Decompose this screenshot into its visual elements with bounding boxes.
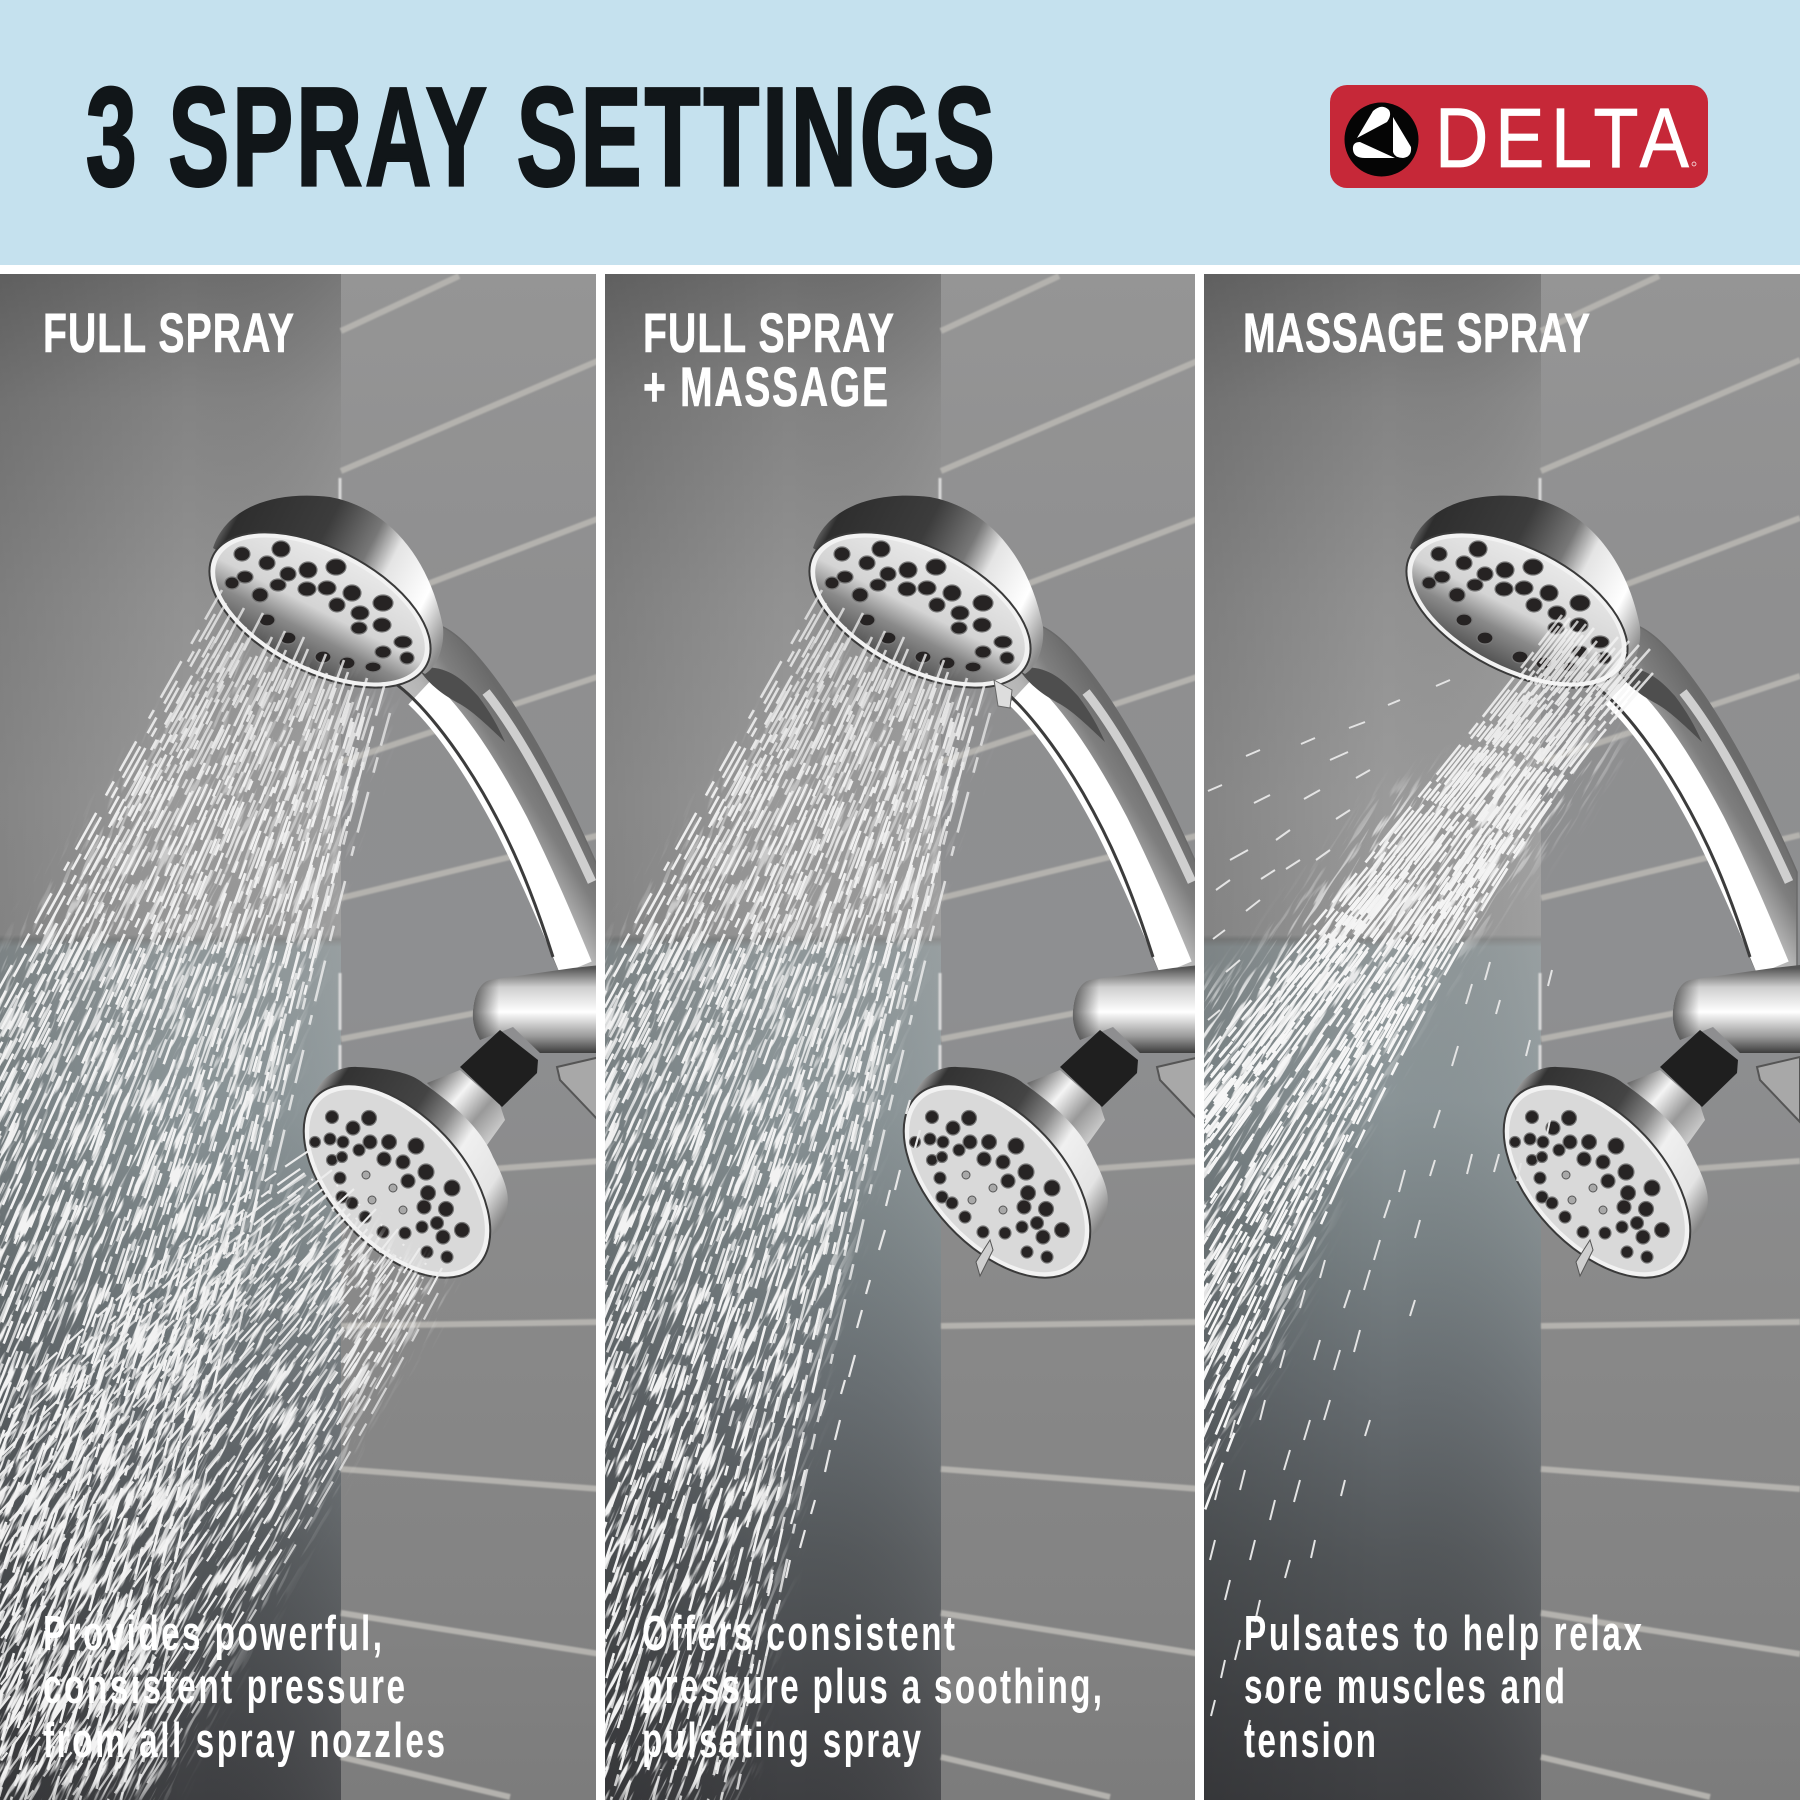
logo: Delta <box>1330 85 1708 188</box>
scattered droplets <box>1208 680 1552 1736</box>
description: tension <box>1244 1713 1376 1768</box>
lever <box>994 680 1012 708</box>
heading <box>643 302 894 419</box>
lever on fixed head <box>1576 1240 1593 1276</box>
photo: both heads spraying <box>0 274 596 1800</box>
description <box>642 1606 1102 1768</box>
description: consistent pressure <box>43 1659 405 1714</box>
header band <box>0 0 1800 265</box>
heading: FULL SPRAY <box>43 302 294 365</box>
title: 3 SPRAY SETTINGS <box>86 59 995 216</box>
heading: MASSAGE SPRAY <box>1243 302 1590 365</box>
panel: full spray <box>0 274 596 1800</box>
description: Pulsates to help relax <box>1244 1606 1642 1661</box>
heading: + MASSAGE <box>643 356 888 419</box>
description: Offers consistent <box>642 1606 955 1661</box>
photo: hand shower spraying <box>605 274 1195 1800</box>
panel: full spray + massage <box>605 274 1195 1800</box>
heading: FULL SPRAY <box>643 302 894 365</box>
logo: Delta: DELTA <box>1435 91 1689 185</box>
panel: massage spray <box>1204 274 1800 1800</box>
description <box>1244 1606 1642 1768</box>
description: pulsating spray <box>642 1713 922 1768</box>
description: pressure plus a soothing, <box>642 1659 1102 1714</box>
lever on fixed head <box>976 1240 993 1276</box>
description <box>43 1606 445 1768</box>
description: from all spray nozzles <box>43 1713 445 1768</box>
description: Provides powerful, <box>43 1606 382 1661</box>
droplets <box>717 1100 920 1774</box>
photo: massage jet <box>1204 274 1800 1800</box>
description: sore muscles and <box>1244 1659 1565 1714</box>
